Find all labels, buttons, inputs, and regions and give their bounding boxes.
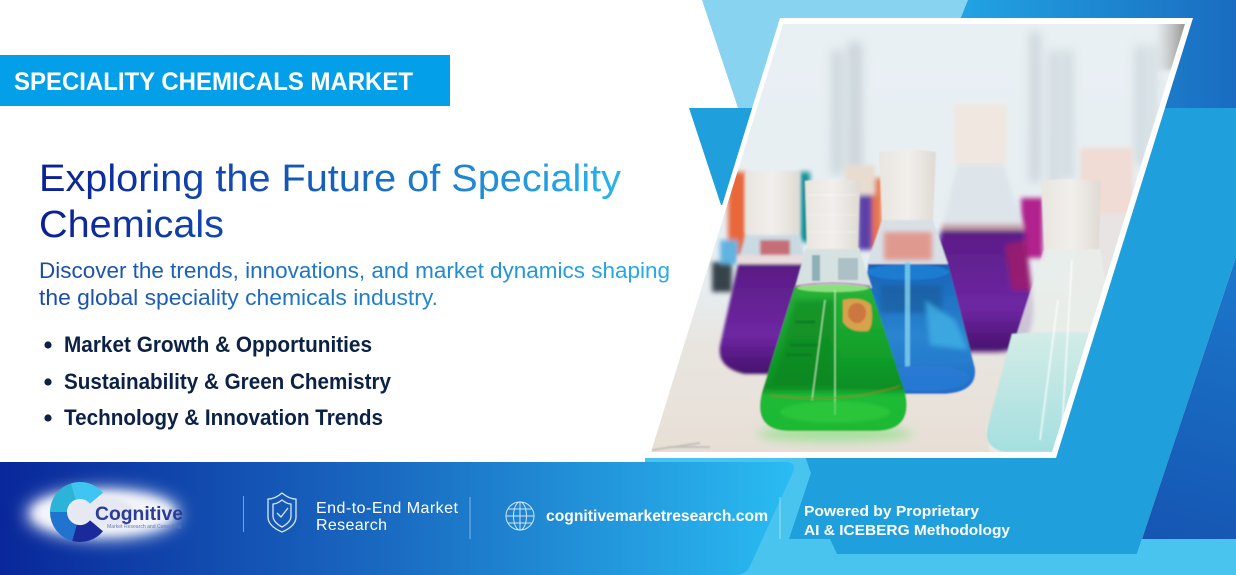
title: Exploring the Future of Speciality	[39, 158, 621, 200]
background shape: light blue top band	[702, 0, 968, 130]
footer bar	[0, 462, 794, 575]
background shape: blue notch triangle	[689, 108, 760, 205]
bullet list: Sustainability & Green Chemistry	[64, 369, 392, 394]
text: end-to-end market research: End-to-End Market	[316, 500, 459, 517]
flask: blue	[860, 150, 975, 394]
title: Chemicals	[39, 204, 224, 246]
text: powered by: Powered by Proprietary	[804, 504, 979, 520]
flask: green	[757, 179, 913, 442]
logo: Cognitive: Market Research and Consulting	[107, 524, 181, 530]
flask: back right peach	[1078, 146, 1134, 280]
background shape: bright blue strip along bottom	[645, 458, 1236, 575]
text: powered by	[804, 504, 1010, 539]
banner	[0, 55, 450, 106]
logo: Cognitive: Cognitive	[95, 504, 183, 525]
background shape: top right blue block	[960, 0, 1236, 108]
text: website: cognitivemarketresearch.com	[546, 508, 768, 525]
subtitle	[39, 258, 670, 310]
icon: globe	[506, 502, 534, 530]
bullet list: Technology & Innovation Trends	[64, 405, 383, 430]
subtitle: the global speciality chemicals industry.	[39, 285, 438, 310]
title	[39, 158, 621, 246]
frame: white photo border	[644, 18, 1193, 458]
text: powered by: AI & ICEBERG Methodology	[804, 523, 1010, 539]
bullet list	[44, 332, 392, 430]
banner: SPECIALITY CHEMICALS MARKET	[14, 68, 413, 96]
icon: shield	[268, 493, 296, 532]
bullet list: Market Growth & Opportunities	[64, 332, 372, 357]
subtitle: Discover the trends, innovations, and market dynamics shaping	[39, 258, 670, 283]
photo: laboratory flasks	[640, 20, 1190, 456]
background shape: right dark triangle	[1142, 257, 1236, 539]
flask: clear cyan	[986, 179, 1101, 452]
bench glass rod	[652, 443, 710, 450]
text: end-to-end market research	[316, 500, 459, 534]
flask: left purple	[720, 171, 812, 374]
text: end-to-end market research: Research	[316, 517, 387, 534]
background shape: bottom centre blue block	[789, 458, 900, 554]
logo: Cognitive	[27, 482, 183, 542]
background shape: centre blue panel	[700, 108, 1236, 554]
flask: right purple	[937, 104, 1035, 356]
